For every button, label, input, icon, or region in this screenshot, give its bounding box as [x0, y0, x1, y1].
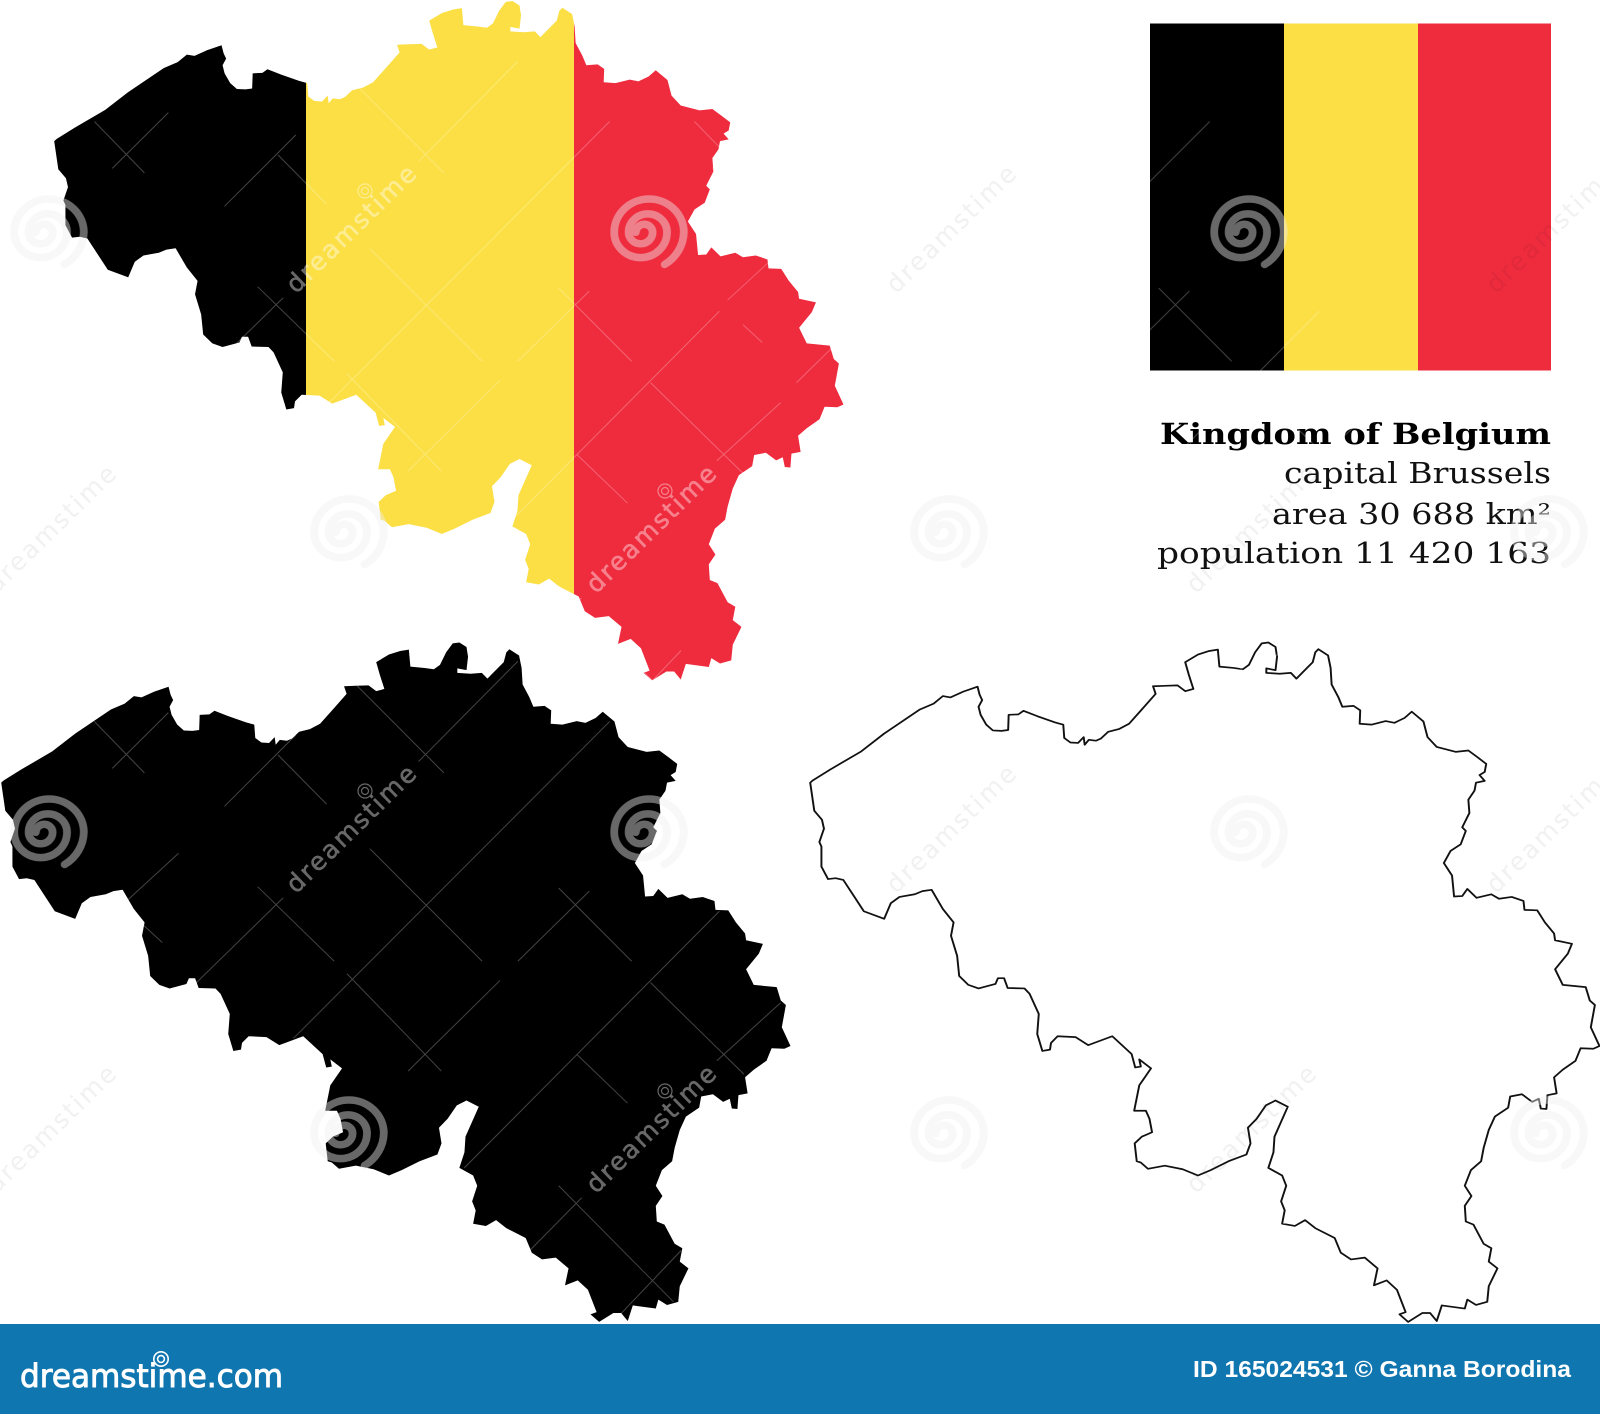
footer bar [0, 1324, 1600, 1414]
faint watermark on white areas: dreamstime [880, 159, 1022, 299]
black silhouette map of Belgium [1, 642, 790, 1322]
area: area 30 688 km² [1272, 497, 1551, 531]
flag of Belgium [1150, 24, 1551, 370]
watermark over coloured and black areas: dreamstime [280, 159, 422, 299]
faint watermark on white areas: dreamstime [1180, 1059, 1322, 1199]
image id and credit: ID 165024531 © Ganna Borodina [1193, 1356, 1571, 1382]
watermark over coloured and black areas: dreamstime [580, 1059, 722, 1199]
watermark over coloured and black areas: dreamstime [280, 759, 422, 899]
logo spiral mark [154, 1352, 168, 1366]
flag-filled map of Belgium [54, 1, 844, 680]
faint watermark on white areas: dreamstime [1180, 459, 1322, 599]
faint watermark on white areas [0, 159, 1600, 1199]
outline map of Belgium [810, 642, 1599, 1322]
watermark over coloured and black areas: dreamstime [580, 459, 722, 599]
country facts text block [1157, 417, 1551, 570]
faint watermark on white areas: dreamstime [880, 759, 1022, 899]
population: population 11 420 163 [1157, 536, 1551, 570]
dreamstime logo: dreamstime.com [20, 1357, 283, 1395]
capital: capital Brussels [1284, 456, 1551, 490]
country name: Kingdom of Belgium [1160, 417, 1551, 451]
